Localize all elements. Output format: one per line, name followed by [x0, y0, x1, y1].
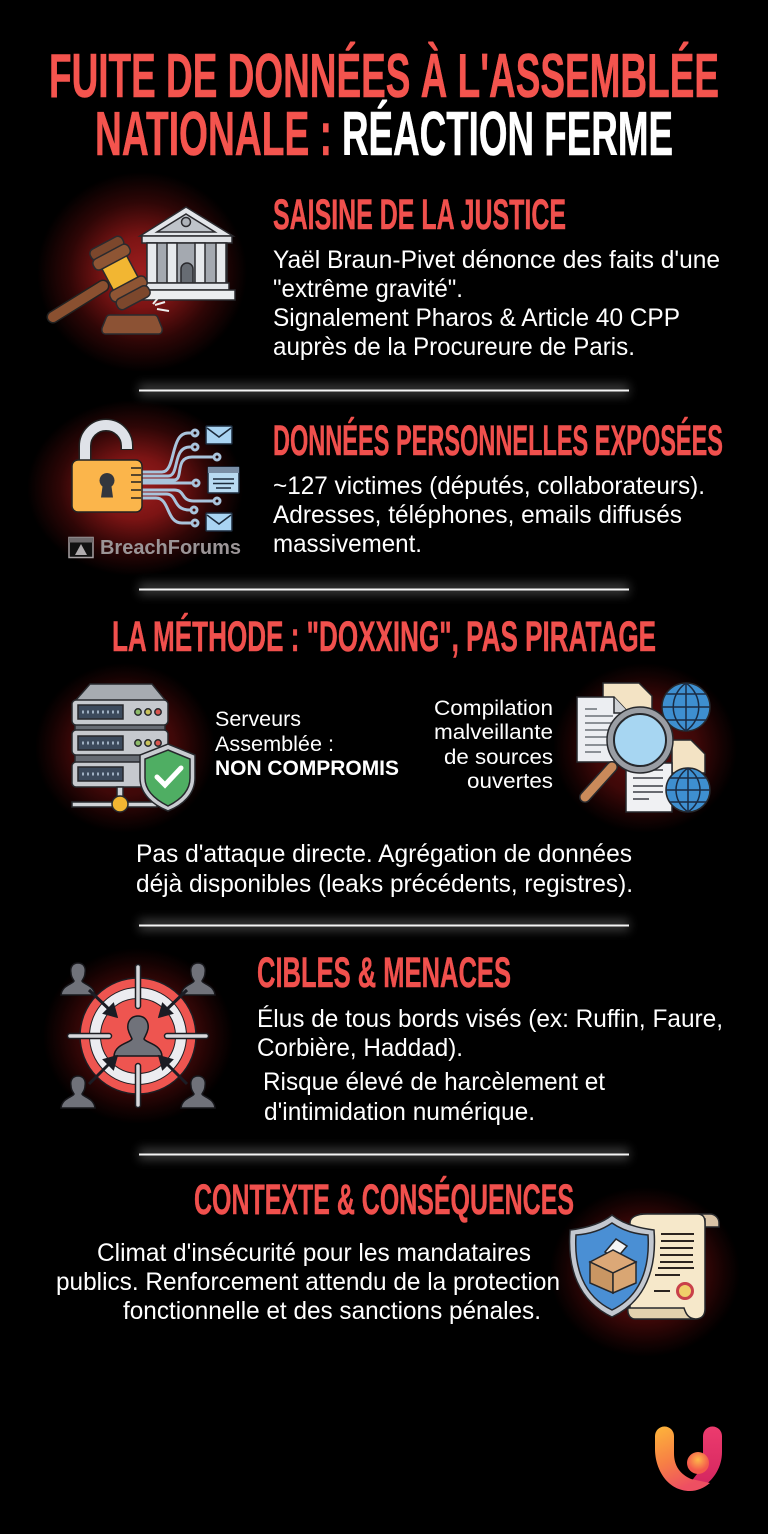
text: données	[273, 472, 705, 558]
text: serveurs: Serveurs	[215, 707, 301, 731]
text: contexte: fonctionnelle et des sanctions pénales.	[123, 1297, 541, 1325]
text: pas d'attaque directe	[136, 840, 633, 898]
text: saisine: Yaël Braun-Pivet dénonce des faits d'une	[273, 246, 720, 274]
text: compilation: malveillante	[434, 720, 553, 744]
text: compilation: ouvertes	[467, 769, 553, 793]
text: cibles: Risque élevé de harcèlement et	[263, 1068, 605, 1096]
text: saisine: "extrême gravité".	[273, 275, 463, 303]
title: NATIONALE :	[95, 100, 332, 169]
text: saisine: auprès de la Procureure de Paris.	[273, 333, 635, 361]
icon: target with surrounding figures	[61, 963, 215, 1108]
icon: gavel and courthouse	[53, 207, 235, 334]
text: saisine: Signalement Pharos & Article 40 CPP	[273, 304, 680, 332]
text: données: ~127 victimes (députés, collaborateurs).	[273, 472, 705, 500]
text: compilation: de sources	[444, 745, 553, 769]
text: contexte: Climat d'insécurité pour les mandataires	[97, 1239, 531, 1267]
text: serveurs: NON COMPROMIS	[215, 756, 399, 780]
text: données: Adresses, téléphones, emails diffusés	[273, 501, 682, 529]
text: serveurs	[215, 707, 399, 780]
text: cibles: Élus de tous bords visés (ex: Ruffin, Faure,	[257, 1004, 723, 1033]
icon: documents, magnifier and globes	[577, 683, 710, 812]
text: données: massivement.	[273, 530, 422, 558]
heading: cibles et menaces: CIBLES & MENACES	[257, 949, 511, 997]
text: cibles: d'intimidation numérique.	[264, 1098, 535, 1126]
text: pas d'attaque directe: déjà disponibles (leaks précédents, registres).	[136, 870, 633, 898]
text: serveurs: Assemblée :	[215, 732, 334, 756]
icon: open padlock with data lines	[72, 425, 239, 531]
heading: saisine de la justice: SAISINE DE LA JUSTICE	[273, 191, 566, 239]
label: BreachForums: BreachForums	[100, 537, 241, 559]
text: contexte: publics. Renforcement attendu de la protection	[56, 1268, 560, 1296]
text: compilation	[434, 696, 553, 793]
text: cibles	[257, 1004, 723, 1126]
text: pas d'attaque directe: Pas d'attaque directe. Agrégation de données	[136, 840, 632, 868]
text: saisine	[273, 246, 720, 361]
title	[49, 42, 719, 169]
icon: server with shield	[72, 684, 195, 812]
text: cibles: Corbière, Haddad).	[257, 1034, 463, 1062]
icon: shield with ballot box and scroll	[570, 1214, 719, 1319]
text: contexte	[56, 1239, 560, 1325]
logo	[655, 1426, 722, 1491]
text: compilation: Compilation	[434, 696, 553, 720]
